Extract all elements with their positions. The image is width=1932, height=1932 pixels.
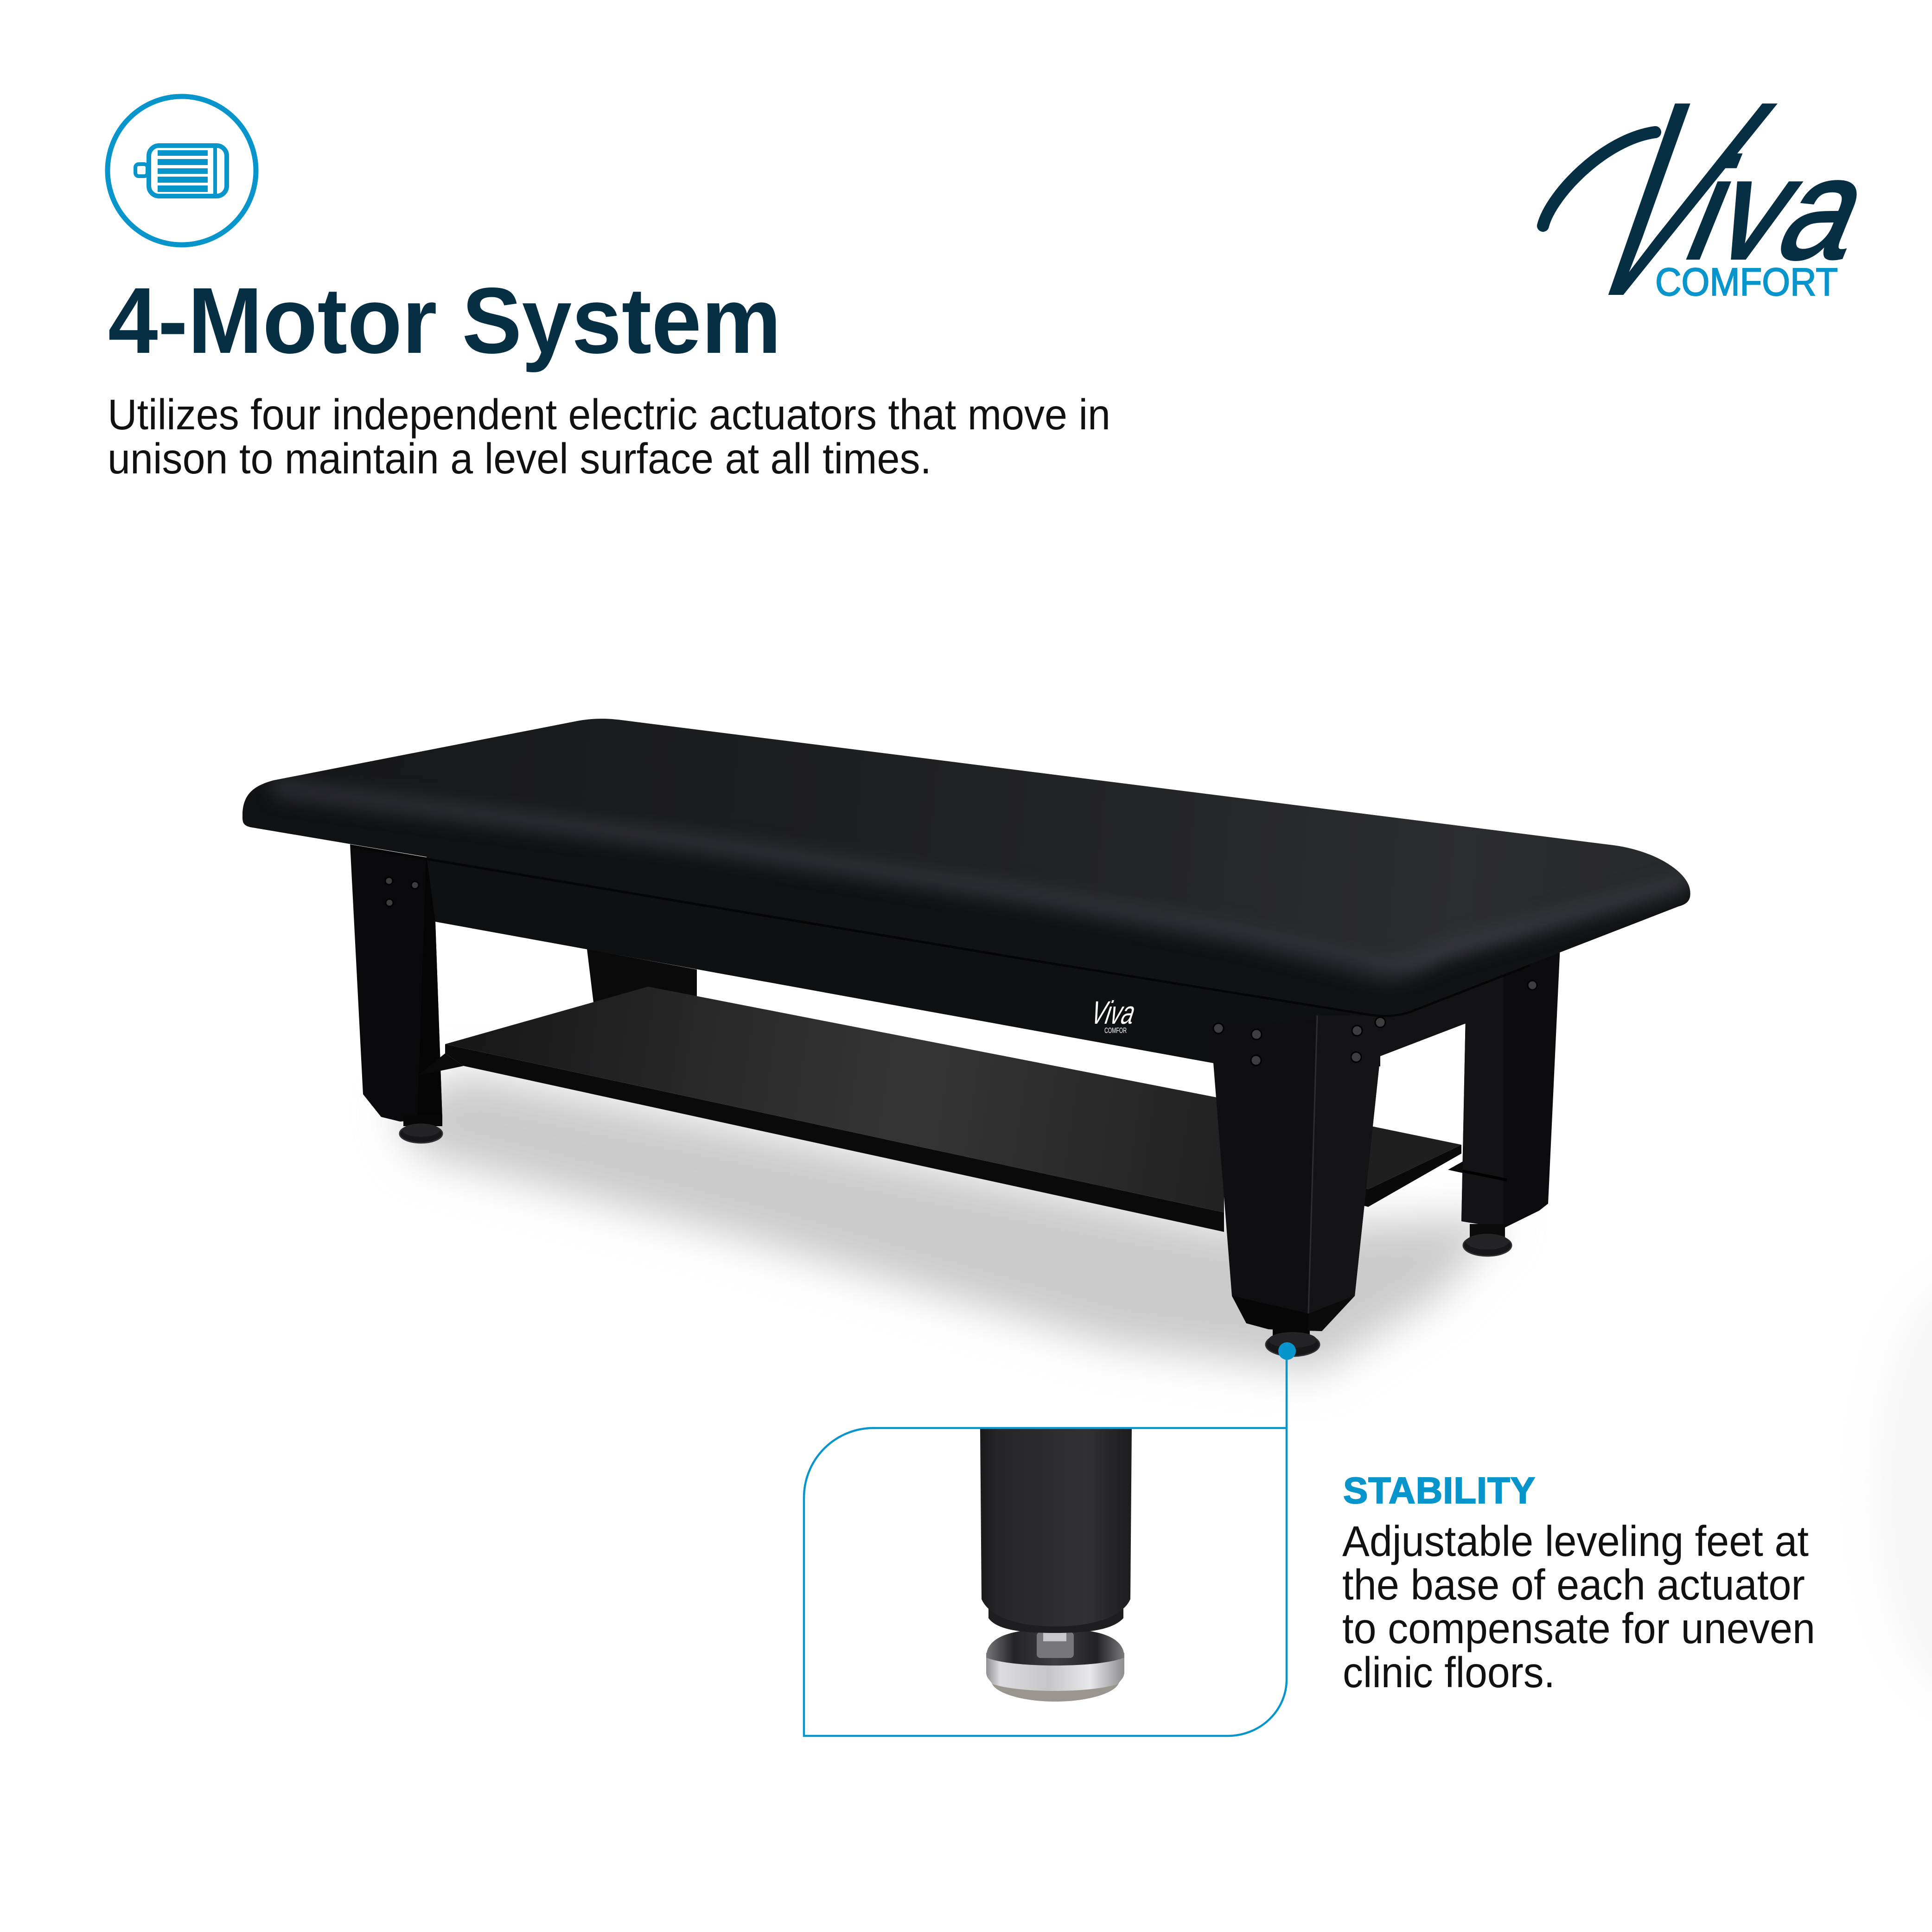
title: 4-Motor System	[108, 268, 781, 373]
callout body text: clinic floors.	[1343, 1648, 1555, 1696]
treatment table illustration	[232, 709, 1706, 1356]
logo: Viva Comfort: V	[1530, 44, 1814, 354]
small brand mark on rail	[1086, 995, 1141, 1035]
dark chrome dome	[986, 1629, 1124, 1665]
logo: Viva Comfort: iva	[1667, 129, 1894, 288]
icon: electric motor in circle	[108, 96, 256, 245]
small brand mark on rail: COMFOR	[1104, 1026, 1127, 1035]
column	[980, 1428, 1132, 1626]
front right leg	[1205, 1015, 1380, 1356]
chrome band	[986, 1653, 1124, 1691]
callout marker dot	[1278, 1342, 1296, 1360]
cushion edge highlight	[274, 788, 1688, 970]
callout frame and leader line	[804, 1352, 1287, 1736]
faint grey glow at right edge	[1878, 1284, 1932, 1692]
cushioned top	[242, 719, 1690, 1001]
cushion front band	[232, 788, 1706, 1034]
rubber foot base	[991, 1674, 1119, 1702]
callout body text: the base of each actuator	[1342, 1561, 1805, 1609]
back left leg	[587, 949, 697, 1006]
lower shelf	[445, 987, 1463, 1232]
callout body text	[1342, 1517, 1815, 1696]
callout body text: to compensate for uneven	[1342, 1604, 1815, 1652]
front left leg	[350, 844, 464, 1143]
description text: Utilizes four independent electric actuators that move in	[108, 390, 1110, 439]
description text	[108, 390, 1110, 483]
callout body text: Adjustable leveling feet at	[1342, 1517, 1809, 1565]
cushion surface	[242, 719, 1690, 978]
collar	[988, 1609, 1123, 1633]
logo: Viva Comfort: COMFORT	[1655, 260, 1838, 304]
bolts	[385, 877, 1537, 1065]
table floor shadow	[394, 1071, 1507, 1372]
back right leg	[1461, 946, 1560, 1256]
description text: unison to maintain a level surface at all times.	[108, 434, 931, 483]
front rail	[426, 853, 1380, 1066]
small brand mark on rail: Viva	[1086, 995, 1141, 1031]
callout heading: STABILITY	[1343, 1470, 1535, 1511]
callout detail: leveling foot photo	[980, 1428, 1132, 1702]
cushion bottom contact shadow	[352, 847, 1530, 1016]
side rail	[1345, 969, 1504, 1056]
